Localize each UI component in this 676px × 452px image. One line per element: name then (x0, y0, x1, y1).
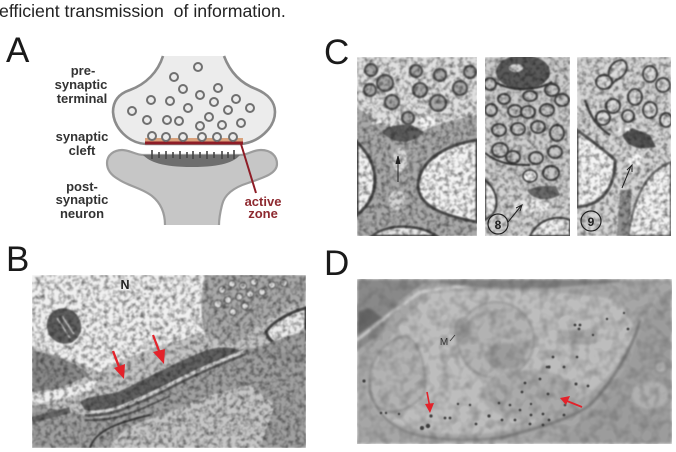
receptors (152, 150, 234, 159)
panel C left micrograph (357, 57, 477, 236)
active zone band (145, 138, 243, 144)
red arrow left (113, 351, 125, 379)
lower cytoplasm (32, 330, 306, 448)
left dendrite (357, 142, 375, 215)
dense presynaptic density (80, 347, 240, 410)
labels for diagram: terminal (57, 91, 107, 106)
labels for diagram: synaptic (56, 192, 108, 207)
circled figure number 9: 9 (588, 215, 595, 229)
labels for diagram: neuron (60, 206, 104, 221)
red arrow left (425, 392, 434, 413)
labels for diagram: synaptic (56, 129, 108, 144)
labels for diagram: cleft (69, 143, 96, 158)
labels for diagram: pre- (71, 63, 95, 78)
labels for diagram: synaptic (55, 77, 107, 92)
circled figure number 8: 8 (495, 218, 502, 232)
nucleus light region (32, 275, 209, 372)
pale vesicle-free area (419, 116, 435, 128)
active zone leader line (241, 144, 256, 193)
labels for diagram: post- (66, 179, 98, 194)
right dendrite (418, 140, 477, 222)
dense-core vesicles (362, 312, 629, 430)
main terminal profile (366, 290, 636, 434)
panel D: electron micrograph (357, 279, 672, 444)
panel letter B: B (6, 240, 29, 279)
circled figure number 8 (488, 214, 508, 234)
left mitochondrion (369, 336, 425, 412)
panel C middle micrograph (484, 55, 570, 236)
intro text line: efficient transmission of information. (0, 1, 286, 21)
red arrow right (560, 396, 582, 407)
active zone label (245, 194, 281, 221)
postsynaptic outline (107, 150, 277, 225)
panel letter C: C (324, 33, 349, 72)
presynaptic terminal (113, 56, 275, 144)
panel letter D: D (324, 244, 349, 283)
centre mitochondrion (458, 302, 534, 378)
postsynaptic neuron (107, 150, 277, 225)
panel C right micrograph (577, 57, 672, 236)
active zone label: zone (248, 206, 278, 221)
dense-core vesicle area (482, 370, 578, 420)
synaptic vesicles (128, 63, 254, 141)
active zone label: active (245, 194, 281, 209)
organelle top right (266, 308, 306, 345)
synaptic cleft band (85, 352, 245, 413)
black arrow (508, 205, 522, 222)
panel A: synapse diagram (107, 56, 277, 225)
top left dark fibres (357, 279, 430, 350)
black arrow (622, 165, 632, 188)
mitochondrion-like organelle (46, 307, 82, 345)
M label (440, 334, 456, 345)
terminal outline (113, 56, 275, 144)
pale band left (32, 378, 100, 405)
labels for diagram (55, 63, 108, 221)
panel B: electron micrograph (32, 275, 306, 448)
red arrow right (153, 335, 165, 364)
panel letter A: A (6, 31, 30, 70)
pale vesicular area above cleft (186, 332, 205, 338)
right lower cell (555, 290, 672, 444)
top band (440, 279, 620, 288)
M label: M (440, 337, 448, 348)
postsynaptic density (143, 155, 240, 167)
bottom curve (372, 227, 437, 236)
black arrow (396, 156, 400, 182)
circled figure number 9 (581, 211, 601, 231)
vesicle cluster (201, 275, 306, 345)
N label: N (120, 278, 130, 292)
